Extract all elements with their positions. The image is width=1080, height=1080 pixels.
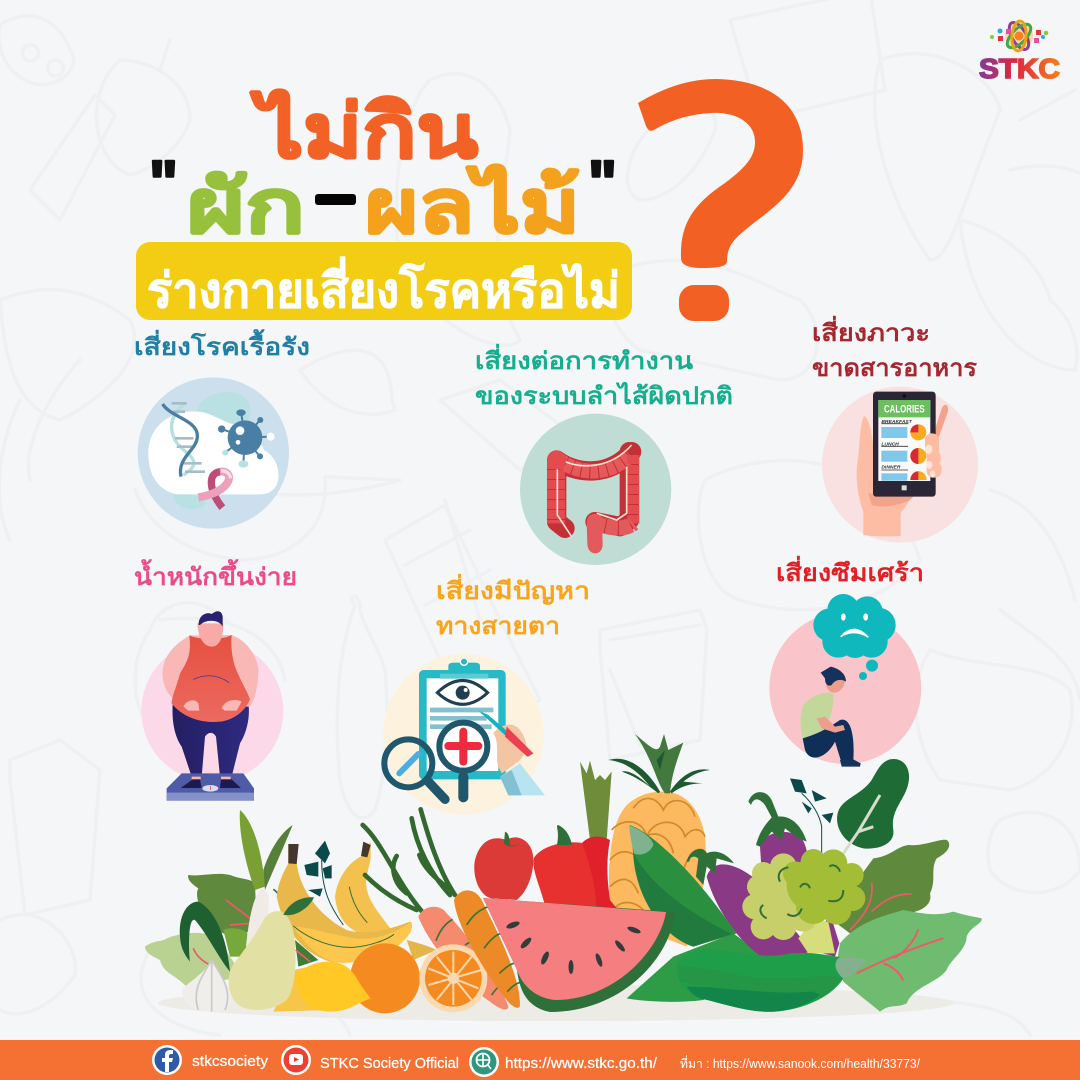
- phone heading: CALORIES: [884, 404, 925, 416]
- label: malnutrition: [812, 315, 977, 382]
- line 1: เสี่ยงต่อการทำงาน: [475, 343, 694, 375]
- back leaf stripe: [295, 940, 318, 967]
- icon: chronic disease circle: [138, 377, 289, 529]
- line 1: เสี่ยงมีปัญหา: [436, 573, 590, 605]
- virus: [218, 409, 275, 468]
- seeds: [505, 920, 641, 974]
- subtitle banner: [136, 242, 632, 320]
- pants: [172, 703, 249, 777]
- back cucumber: [627, 933, 770, 1002]
- garlic: [182, 960, 232, 1012]
- hand: [857, 416, 910, 536]
- zucchini: [677, 949, 867, 1012]
- closing quote: ": [588, 149, 617, 218]
- title: line 2: [149, 149, 617, 248]
- icon: calorie phone circle: [822, 387, 978, 543]
- magnifier left: [384, 739, 432, 787]
- source credit: ที่มา : https://www.sanook.com/health/33773/: [680, 1055, 921, 1071]
- youtube: [281, 1045, 459, 1075]
- phone: [873, 392, 936, 497]
- light green leaf: [837, 910, 982, 1012]
- ground shadow: [158, 985, 954, 1021]
- onion greens: [363, 809, 455, 915]
- dash: [315, 194, 356, 205]
- title: line 1: ไม่กิน: [250, 88, 478, 173]
- facebook handle: stkcsociety: [192, 1053, 269, 1070]
- footer bar: [0, 1040, 1080, 1080]
- broccoli: [742, 849, 865, 953]
- right side produce: [580, 734, 982, 1012]
- carrot right: [454, 890, 520, 1008]
- olive leaf: [837, 840, 949, 933]
- sad face: [841, 613, 868, 637]
- facebook: [152, 1045, 269, 1075]
- website url: https://www.stkc.go.th/: [505, 1055, 658, 1072]
- youtube name: STKC Society Official: [320, 1055, 459, 1072]
- colon lumps: [529, 460, 583, 523]
- illustration: pile of vegetables and fruit: [145, 734, 982, 1021]
- logo: STKC: [979, 20, 1060, 84]
- website: [469, 1047, 658, 1077]
- lemon: [296, 962, 371, 1012]
- magnifier right: [439, 723, 487, 771]
- meal rows: BREAKFAST: [881, 419, 913, 425]
- small lemon: [273, 967, 330, 1012]
- label: vision problems: [436, 573, 590, 640]
- pen: [478, 711, 533, 757]
- dark leaf arch: [180, 902, 230, 972]
- olive lettuce: [188, 874, 257, 937]
- icon: sad person with thought cloud: [769, 594, 921, 767]
- icon: overweight man on scale: [141, 611, 283, 801]
- carrot left: [418, 907, 508, 1009]
- thought cloud: [813, 594, 896, 680]
- arms and body: [163, 635, 258, 707]
- fingers: [925, 433, 942, 478]
- person: [826, 672, 845, 693]
- clipboard: [419, 670, 506, 779]
- icon: eye exam clipboard: [383, 654, 545, 815]
- orange: [350, 943, 420, 1013]
- apple: [474, 832, 533, 900]
- lower eggplant: [687, 849, 839, 960]
- watermelon slice: [483, 898, 675, 1012]
- label: chronic disease: เสี่ยงโรคเรื้อรัง: [134, 328, 310, 361]
- line 2: ของระบบลำไส้ผิดปกติ: [475, 381, 733, 410]
- spring onion: [240, 810, 293, 947]
- DNA helix: [163, 403, 205, 477]
- ribbon: [198, 471, 231, 508]
- pale lettuce: [145, 933, 243, 987]
- opening quote: ": [149, 149, 178, 218]
- second parsley: [304, 841, 343, 925]
- label: digestive system: [475, 343, 733, 410]
- scale: [167, 773, 254, 801]
- head: [197, 623, 223, 647]
- meal rows: LUNCH: [881, 442, 899, 448]
- logo wordmark: STKC: [979, 53, 1060, 84]
- orange slice: [419, 944, 487, 1012]
- label: weight gain: น้ำหนักขึ้นง่าย: [134, 558, 297, 591]
- pear: [229, 897, 314, 1010]
- coat and hand: [500, 763, 545, 795]
- word: fruit: ผลไม้: [365, 163, 580, 248]
- eye: [437, 680, 488, 704]
- colon highlight: [557, 445, 632, 537]
- upper eggplant: [748, 792, 808, 897]
- parsley: [790, 778, 833, 853]
- left side produce: [145, 809, 533, 1013]
- logo mark: atom with dots: [990, 20, 1048, 52]
- meal rows: [881, 419, 927, 481]
- front cucumber: [629, 825, 737, 947]
- pineapple: [580, 734, 710, 947]
- line 1: เสี่ยงภาวะ: [812, 315, 930, 347]
- subtitle text: ร่างกายเสี่ยงโรคหรือไม่: [147, 256, 620, 318]
- line 2: ขาดสารอาหาร: [812, 355, 977, 382]
- meal rows: DINNER: [881, 465, 901, 471]
- red pepper: [534, 825, 618, 910]
- dark leaf: [837, 759, 909, 858]
- icon: big question mark: [638, 79, 803, 321]
- label: depression: เสี่ยงซึมเศร้า: [776, 555, 924, 587]
- bananas: [277, 842, 437, 963]
- colon base: [557, 452, 632, 528]
- line 2: ทางสายตา: [436, 613, 560, 640]
- word: vegetables: ผัก: [187, 165, 305, 248]
- icon: colon circle: [520, 414, 671, 565]
